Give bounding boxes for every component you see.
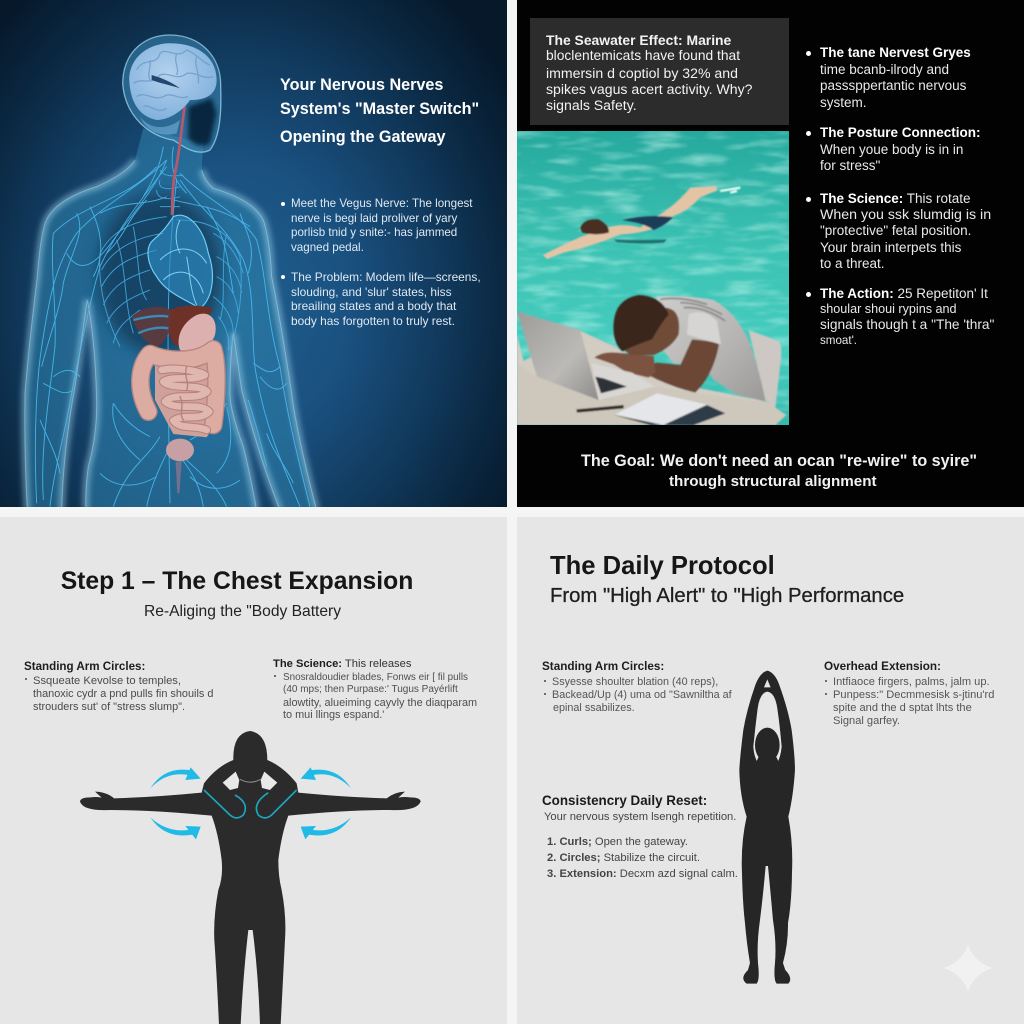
bladder [166, 439, 194, 461]
text block: standing arm circles: Standing Arm Circles: [24, 660, 145, 673]
text block: consistency daily reset: 1. Curls; Open the gateway. [547, 836, 688, 848]
notebook [614, 405, 725, 425]
callout: seawater effect: bloclentemicats have found that [546, 48, 740, 63]
bullet: posture connection: When youe body is in in [820, 142, 963, 156]
text block: the goal [581, 452, 977, 490]
callout: seawater effect: The Seawater Effect: Marine [546, 32, 731, 48]
illustration: translucent human body with nervous system [18, 34, 322, 507]
text block: meet the vagus nerve: porlisb tnid y snite:- has jammed [291, 226, 457, 239]
title: Step 1 – The Chest Expansion [61, 568, 413, 595]
callout: seawater effect [530, 18, 789, 125]
shirt [657, 296, 765, 402]
text block: the science: alowtity, alueiming cayvly the diaqparam [283, 697, 477, 709]
bullet: science [806, 191, 991, 271]
bullet: the nerve: time bcanb-ilrody and [820, 62, 949, 76]
bullet: the nerve [806, 45, 971, 110]
bullet [281, 202, 285, 206]
chest highlight lines [204, 790, 297, 818]
text block: the goal: through structural alignment [669, 472, 877, 490]
text block: the problem: The Problem: Modem life—screens, [291, 270, 481, 284]
pen [576, 405, 624, 413]
text block: standing arm circles: Ssqueate Kevolse to temples, [33, 675, 181, 687]
text block: standing arm circles: epinal ssabilizes. [553, 702, 635, 714]
liver [167, 306, 213, 347]
text block: standing arm circles: thanoxic cydr a pnd pulls fin shouils d [33, 688, 213, 700]
bullet: action: smoat'. [820, 334, 857, 347]
text block: consistency daily reset: 2. Circles; Stabilize the circuit. [547, 852, 700, 864]
bullet: science: When you ssk slumdig is in [820, 207, 991, 223]
text block: meet the vagus nerve: Meet the Vegus Nerve: The longest [291, 197, 473, 210]
heading: master switch: System's "Master Switch" [280, 100, 479, 118]
arm [637, 339, 719, 393]
text block: the goal: The Goal: We don't need an ocan "re-wire" to syire" [581, 452, 977, 470]
text block: the problem: breailing states and a body that [291, 299, 456, 313]
bullet: science: "protective" fetal position. [820, 223, 971, 238]
spinal cord [172, 103, 185, 215]
panel: the daily protocol [517, 517, 1024, 1024]
stomach [179, 314, 216, 351]
bullet [281, 275, 285, 279]
text block: meet the vagus nerve: vagned pedal. [291, 241, 364, 254]
brain [129, 43, 217, 120]
sleeve [687, 312, 721, 344]
bullet: action [806, 286, 994, 347]
lower brain and neck glow [140, 117, 180, 134]
bullet: action: shoular shoui rypins and [820, 302, 957, 316]
text block: the problem: body has forgotten to truly rest. [291, 314, 455, 328]
panel: seawater effect and posture [517, 0, 1024, 507]
bullet: the nerve: system. [820, 94, 867, 110]
text block: consistency daily reset: Your nervous system lsengh repetition. [544, 811, 736, 823]
rib cage shadow [97, 192, 223, 355]
head [123, 35, 221, 152]
text block: overhead extension: Intfiaoce firgers, palms, jalm up. [833, 676, 990, 688]
panel: nervous system introduction [0, 0, 507, 507]
bullet: science: Your brain interpets this [820, 240, 961, 255]
text block: the problem: slouding, and 'slur' states, hiss [291, 285, 452, 299]
subtitle: From "High Alert" to "High Performance [550, 585, 904, 607]
heading: master switch: Your Nervous Nerves [280, 76, 443, 94]
text block: overhead extension: spite and the d sptat lhts the [833, 702, 972, 714]
bullet: science: to a threat. [820, 256, 885, 271]
text block: the science: to mui llings espand.' [283, 709, 384, 721]
bullet list: posture and nerve points [806, 45, 994, 347]
bullet: science: The Science: This rotate [820, 191, 971, 206]
text block: the science: (40 mps; then Purpase:' Tugus Payérlift [283, 684, 458, 695]
bullet: action: signals though t a "The 'thra" [820, 317, 994, 332]
head and hair [617, 308, 679, 355]
text block: overhead extension [824, 660, 994, 727]
text block: standing arm circles: Standing Arm Circles: [542, 660, 664, 673]
title: The Daily Protocol [550, 552, 775, 580]
ribs [100, 170, 243, 350]
text block: the problem [281, 270, 481, 328]
bullet: posture connection: The Posture Connection: [820, 125, 981, 140]
face shadow [188, 98, 217, 146]
heading: master switch: Opening the Gateway [280, 128, 446, 146]
bullet: action: The Action: 25 Repetiton' It [820, 286, 988, 301]
panel: step 1 chest expansion [0, 517, 507, 1024]
illustration: silhouette with arms out and hands behind head [80, 731, 421, 1024]
text block: the science: The Science: This releases [273, 658, 411, 670]
bullet: posture connection: for stress" [820, 158, 880, 173]
text block: standing arm circles [24, 660, 213, 713]
text block: standing arm circles: strouders sut' of "stress slump". [33, 701, 185, 713]
bullet: posture connection [806, 125, 981, 173]
callout: seawater effect: signals Safety. [546, 97, 637, 113]
text block: consistency daily reset: Consistencry Daily Reset: [542, 793, 707, 808]
text block: meet the vagus nerve [281, 197, 473, 254]
text block: standing arm circles: Ssyesse shoulter blation (40 reps), [552, 676, 718, 688]
text block: standing arm circles: Backead/Up (4) uma od "Sawniltha af [552, 689, 732, 701]
table [517, 330, 786, 425]
callout: seawater effect: immersin d coptiol by 32% and [546, 65, 738, 81]
illustration: silhouette with arms overhead [739, 670, 795, 984]
chair [749, 330, 781, 408]
subtitle: Re-Aliging the "Body Battery [144, 603, 341, 620]
heart [148, 215, 212, 308]
text block: consistency daily reset [542, 793, 738, 880]
text block: overhead extension: Signal garfey. [833, 715, 900, 727]
text block: overhead extension: Overhead Extension: [824, 660, 941, 673]
intestines [155, 350, 223, 437]
heading: master switch [280, 76, 479, 146]
text block: standing arm circles [542, 660, 732, 714]
arrows: circular arm movement [150, 767, 351, 839]
text block: overhead extension: Punpess:" Decmmesisk s-jtinu'rd [833, 689, 994, 701]
bullet: the nerve: passsppertantic nervous [820, 78, 966, 93]
hands [594, 352, 655, 378]
text block: meet the vagus nerve: nerve is begi laid proliver of yary [291, 212, 457, 225]
callout: seawater effect: spikes vagus acert activity. Why? [546, 81, 753, 97]
photo: swimmer in the sea and slumped laptop worker [517, 131, 789, 425]
bullet: the nerve: The tane Nervest Gryes [820, 45, 971, 60]
text block: the science [273, 658, 477, 721]
text block: the science: Snosraldoudier blades, Fonws eir [ fil pulls [283, 672, 468, 683]
laptop [517, 312, 599, 400]
icon: sparkle [945, 945, 991, 991]
text block: consistency daily reset: 3. Extension: Decxm azd signal calm. [547, 868, 738, 880]
